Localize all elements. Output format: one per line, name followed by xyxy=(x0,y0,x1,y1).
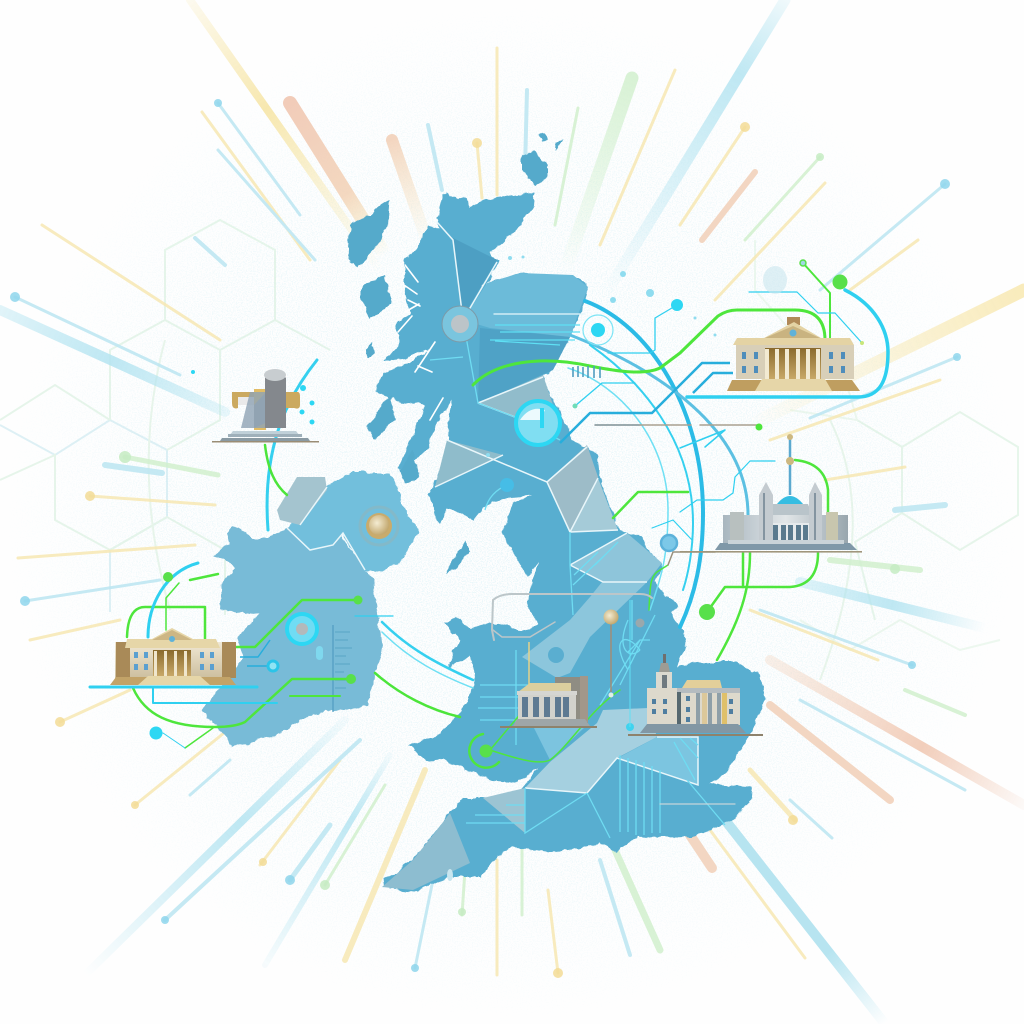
node: Irish small ring xyxy=(268,646,323,671)
node: Northern Ireland gold knob xyxy=(360,507,398,545)
building: Welsh columned hall xyxy=(500,642,597,728)
green circuit connectors xyxy=(127,263,830,768)
node: small ring green xyxy=(800,260,864,345)
data streak lines xyxy=(490,325,580,345)
sea loch gashes xyxy=(398,257,490,420)
node: cyan target xyxy=(583,315,613,345)
building: upper right tan courthouse xyxy=(727,317,860,391)
cyan circuit connectors xyxy=(90,290,888,748)
node: Edinburgh ring xyxy=(516,401,560,445)
node: Irish target xyxy=(287,614,317,644)
node: tick marks xyxy=(573,366,600,378)
building: left tan parliament xyxy=(110,628,236,685)
Ireland landmass xyxy=(202,505,382,748)
building: London hall with tower xyxy=(628,654,763,736)
ray end dots xyxy=(10,99,961,978)
building: stone monument xyxy=(212,369,319,442)
arcs around the map xyxy=(265,301,748,717)
grey rail lines xyxy=(492,314,757,804)
node: England blue markers xyxy=(548,535,677,731)
hexagon network background xyxy=(0,220,1018,680)
node: small dots xyxy=(150,289,762,740)
Irish map scale detail xyxy=(333,625,352,712)
building: grey domed hall xyxy=(680,434,862,553)
Northern Ireland xyxy=(287,473,418,570)
Scottish and Orkney islands xyxy=(348,133,563,575)
background xyxy=(84,84,940,940)
facet lines xyxy=(287,222,698,793)
map facets xyxy=(382,238,698,890)
node: Irish green dots xyxy=(163,274,848,758)
scattered sea speckles xyxy=(447,256,787,881)
node: Scottish grey marker xyxy=(442,306,478,342)
Donegal facet xyxy=(277,477,327,525)
Great Britain landmass xyxy=(375,192,765,892)
node: gold pin xyxy=(604,610,644,698)
map of Britain and Ireland xyxy=(202,133,765,892)
dark blue connectors xyxy=(240,363,733,666)
